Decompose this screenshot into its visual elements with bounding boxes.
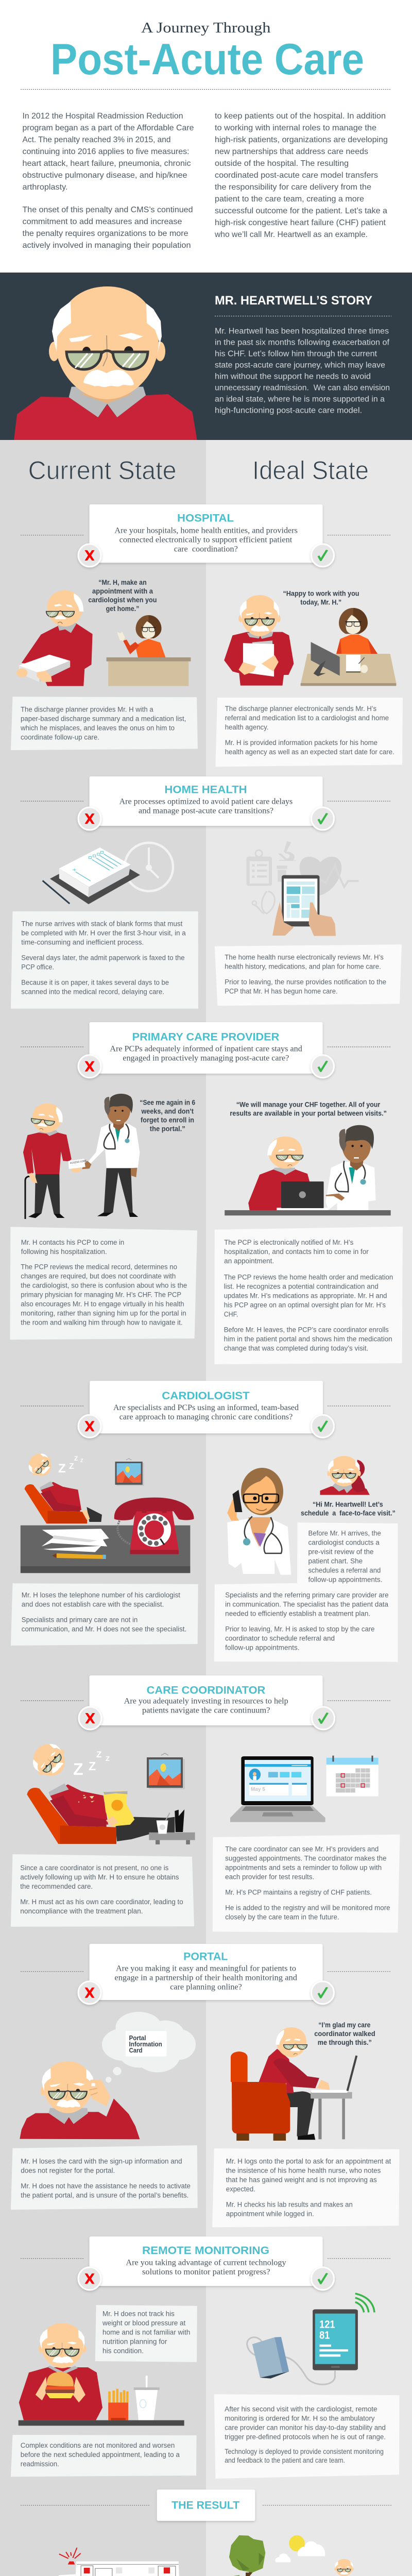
illustration: Mr. H thinking about portal card: Information xyxy=(129,2040,162,2048)
speech: glad my care coordinator xyxy=(314,2021,375,2046)
intro text left column: The onset of this penalty and CMS’s continued xyxy=(23,206,193,214)
text card: home health current xyxy=(11,911,198,1009)
story text xyxy=(215,327,390,415)
text card: portal ideal: appointment while logged in. xyxy=(226,2210,314,2217)
text card: remote monitoring current: Complex conditions are not monitored and worsen xyxy=(21,2442,175,2449)
text card: portal ideal: expected. xyxy=(226,2185,255,2193)
text card: home health current: PCP office. xyxy=(21,963,54,971)
text card: cardiologist ideal: in communication. The specialist has the patient data xyxy=(225,1601,389,1608)
section: Primary Care Provider question: PRIMARY CARE PROVIDER xyxy=(132,1031,279,1043)
illustration: Mr. H thinking about portal card: Portal xyxy=(129,2034,146,2042)
illustration: cardiologist on phone and Mr. H on phone xyxy=(227,1456,370,1575)
text card: portal current: Mr. H loses the card with the sign-up information and xyxy=(21,2158,182,2165)
text card: care coordinator current: actively following up with Mr. H to ensure he obtains xyxy=(20,1873,179,1881)
text card: PCP current: primary physician for managing Mr. H’s CHF. The PCP xyxy=(21,1291,181,1298)
text card: tracking weight inset: his condition. xyxy=(102,2347,144,2355)
story text: him without the support he needs to avoid xyxy=(215,372,371,381)
speech: see me again: “See me again in 6 xyxy=(140,1098,195,1106)
text card: PCP ideal xyxy=(214,1227,403,1364)
text card: PCP ideal: hospitalization, and contacts him to come in for xyxy=(224,1248,369,1256)
section: The Result heading: THE RESULT xyxy=(171,2499,239,2511)
illustration: blood pressure cuff and phone: 81 xyxy=(319,2329,330,2341)
speech: glad my care coordinator: me through this.” xyxy=(318,2038,372,2046)
intro text left column: Act. The penalty reached 3% in 2015, and xyxy=(23,135,171,144)
text card: hospital current: The discharge planner provides Mr. H with a xyxy=(21,706,153,714)
speech: let's schedule a visit: schedule a face-to-face visit.” xyxy=(301,1509,396,1517)
illustration: Mr. H asleep with desk and telephone: Z xyxy=(69,1462,74,1471)
text card: remote monitoring current xyxy=(11,2435,197,2477)
panel: ideal state background xyxy=(206,440,412,2576)
illustration: Mr. H with paper and discharge planner xyxy=(16,590,191,686)
text card: PCP current: the room and walking him through how to navigate it. xyxy=(21,1318,183,1326)
text card: hospital current xyxy=(11,697,198,750)
text card: PCP ideal: The PCP is electronically notified of Mr. H’s xyxy=(224,1239,353,1246)
text card: hospital current: which he misplaces, and leaves the onus on him to xyxy=(20,724,175,732)
section: Cardiologist question: Are specialists and PCPs using an informed, team-based xyxy=(113,1403,299,1412)
intro text left column: program began as a part of the Affordable Care xyxy=(23,124,194,132)
speech: we will manage your CHF: results are available in your portal between visits.” xyxy=(230,1109,387,1117)
text card: remote monitoring current: readmission. xyxy=(21,2460,59,2468)
text card: cardiologist ideal xyxy=(214,1522,398,1662)
intro text right column: new partnerships that address care needs xyxy=(215,147,368,156)
section: Cardiologist question: CARDIOLOGIST xyxy=(162,1390,250,1402)
text card: care coordinator current: Since a care coordinator is not present, no one is xyxy=(20,1864,169,1872)
title: Post-Acute Care xyxy=(50,35,364,84)
text card: cardiologist ideal: needed to efficiently establish a treatment plan. xyxy=(225,1610,370,1618)
text card: home health ideal: The home health nurse electronically reviews Mr. H’s xyxy=(225,954,384,961)
text card: care coordinator current: noncompliance with the treatment plan. xyxy=(20,1907,143,1915)
section: Remote Monitoring question xyxy=(21,2236,391,2290)
illustration: Mr. H with cane and doctor handing card: ACCESS CODE xyxy=(70,1159,87,1164)
text card: hospital ideal xyxy=(215,698,403,767)
text card: care coordinator current xyxy=(11,1854,194,1927)
intro text left column: continuing into 2016 applies to five measures: xyxy=(23,147,190,156)
text card: PCP ideal: list. He recognizes a potential contraindication and xyxy=(224,1282,379,1290)
story text: his CHF. Let’s follow him through the current xyxy=(215,350,377,359)
speech: see me again: weeks, and don’t xyxy=(141,1107,194,1115)
section: Portal question: PORTAL xyxy=(183,1951,228,1963)
intro text right column: high-risk congestive heart failure (CHF) patient xyxy=(215,218,386,227)
story text: state post-acute care journey, which may leave xyxy=(215,361,385,370)
intro text right column: outside of the hospital. The resulting xyxy=(215,159,349,168)
story text: in the past six months following exacerbation of xyxy=(215,338,390,347)
text card: cardiologist ideal: follow-up appointments. xyxy=(225,1644,300,1652)
text card: remote monitoring ideal: trigger pre-defined protocols when he is out of range. xyxy=(225,2433,386,2441)
panel: Mr. Heartwell's story xyxy=(0,273,412,440)
illustration: tablet with health icons xyxy=(247,841,358,936)
text card: cardiologist current: communication, and Mr. H does not see the specialist. xyxy=(22,1625,186,1633)
section: Remote Monitoring question: Are you taking advantage of current technology xyxy=(126,2259,286,2267)
text card: care coordinator current: Mr. H must act as his own care coordinator, leading to xyxy=(20,1898,183,1906)
illustration: Mr. H asleep with desk and telephone: Z xyxy=(74,1455,78,1462)
text card: cardiologist ideal: Before Mr. H arrives, the xyxy=(308,1530,381,1537)
intro text left column: arthroplasty. xyxy=(23,183,68,192)
speech: happy to work with you: “Happy to work with you xyxy=(283,589,359,598)
text card: home health ideal xyxy=(215,944,402,1006)
illustration: Mr. H thinking about portal card: Card xyxy=(129,2046,143,2054)
text card: PCP current xyxy=(10,1227,197,1340)
text card: PCP ideal: his PCP agree on an optimal oversight plan for Mr. H’s xyxy=(224,1301,386,1309)
text card: cardiologist ideal: Prior to leaving, Mr. H is asked to stop by the care xyxy=(225,1625,375,1633)
heading: ideal state: Ideal State xyxy=(252,456,369,485)
speech: make an appointment xyxy=(88,578,157,613)
text card: remote monitoring ideal: After his second visit with the cardiologist, remote xyxy=(225,2405,377,2413)
text card: care coordinator ideal: appointments and sets a reminder to follow up with xyxy=(225,1864,382,1872)
text card: portal current: the patient portal, and is unsure of the portal’s benefits. xyxy=(21,2192,188,2199)
text card: cardiologist ideal: schedules a referral and xyxy=(308,1567,381,1574)
section: Remote Monitoring question: solutions to monitor patient progress? xyxy=(142,2268,270,2277)
section: Care Coordinator question: CARE COORDINATOR xyxy=(147,1684,265,1696)
illustration: laptop with patient record and calendar: May 5 xyxy=(251,1787,265,1792)
section: Hospital question: HOSPITAL xyxy=(177,512,234,524)
text card: cardiologist ideal: cardiologist conducts a xyxy=(308,1539,380,1547)
speech: happy to work with you: today, Mr. H.” xyxy=(300,598,341,606)
text card: PCP ideal: CHF. xyxy=(224,1310,238,1318)
text card: remote monitoring ideal xyxy=(214,2394,400,2479)
text card: tracking weight inset xyxy=(95,2305,197,2362)
speech: glad my care coordinator: coordinator walked xyxy=(314,2029,375,2038)
text card: care coordinator ideal xyxy=(213,1835,400,1933)
intro text left column: obstructive pulmonary disease, and hip/knee xyxy=(23,171,187,180)
panel: current state background xyxy=(0,440,206,2576)
text card: care coordinator ideal: Mr. H’s PCP maintains a registry of CHF patients. xyxy=(225,1889,372,1896)
text card: remote monitoring ideal: and feedback to the patient and care team. xyxy=(225,2456,345,2464)
text card: care coordinator ideal: He is added to the registry and will be monitored more xyxy=(225,1904,390,1912)
text card: cardiologist ideal: coordinator to schedule referral and xyxy=(225,1635,335,1642)
text card: PCP current: the cardiologist, so there is confusion about who is the xyxy=(21,1281,187,1289)
text card: PCP current: monitoring, rather than signing him up for the portal in xyxy=(21,1309,186,1317)
text card: hospital current: coordinate follow-up care. xyxy=(21,734,99,741)
section: Primary Care Provider question xyxy=(21,1022,391,1078)
illustration: Mr. H asleep with desk and telephone xyxy=(21,1449,194,1573)
section: Cardiologist question xyxy=(21,1381,391,1437)
text card: PCP ideal: The PCP reviews the home health order and medication xyxy=(224,1273,393,1281)
speech: happy to work with you xyxy=(283,589,359,606)
text card: home health ideal: health history, medications, and plan for home care. xyxy=(225,963,381,971)
text card: remote monitoring ideal: care provider can monitor his day-to-day stability and xyxy=(225,2424,386,2431)
text card: portal ideal: Mr. H logs onto the portal to ask for an appointment at xyxy=(226,2158,391,2165)
section: Hospital question: Are your hospitals, home health entities, and providers xyxy=(114,526,298,535)
speech: make an appointment: get home.” xyxy=(106,604,139,613)
text card: care coordinator current: the recommended care. xyxy=(20,1883,93,1890)
text card: portal current xyxy=(11,2145,198,2210)
text card: portal ideal: that he has gained weight and is not improving as xyxy=(226,2176,377,2184)
text card: tracking weight inset: nutrition planning for xyxy=(102,2338,167,2346)
story text: an ideal state, where he is more supported in a xyxy=(215,395,385,404)
speech: see me again: forget to enroll in xyxy=(141,1115,194,1124)
text card: PCP ideal: updates Mr. H’s medications as appropriate. Mr. H and xyxy=(224,1292,387,1299)
section: Care Coordinator question xyxy=(21,1675,391,1730)
illustration: Mr. H asleep with desk and telephone: Z xyxy=(80,1458,83,1463)
illustration: Mr. H asleep in recliner with chips: Z xyxy=(96,1750,101,1759)
illustration: Mr. H thinking about portal card xyxy=(20,2012,196,2139)
speech: glad my care coordinator: “I’m glad my care xyxy=(318,2021,371,2029)
text card: cardiologist ideal: Specialists and the referring primary care provider are xyxy=(225,1591,388,1599)
text card: hospital ideal: health agency as well as an expected start date for care. xyxy=(225,748,394,756)
section: The Result heading xyxy=(21,2489,391,2521)
text card: home health current: Several days later, the admit paperwork is faxed to the xyxy=(21,954,185,961)
text card: cardiologist current: and does not establish care with the specialist. xyxy=(22,1601,164,1608)
section: Hospital question: connected electronically to support efficient patient xyxy=(119,535,293,544)
illustration: paper forms and clock xyxy=(43,843,173,904)
text card: cardiologist current: Mr. H loses the telephone number of his cardiologist xyxy=(22,1591,180,1599)
text card: care coordinator ideal: The care coordinator can see Mr. H’s providers and xyxy=(225,1845,379,1853)
intro text right column: to working with internal roles to manage the xyxy=(215,124,376,132)
intro text right column: the responsibility for care delivery from the xyxy=(215,183,371,192)
speech: make an appointment: “Mr. H, make an xyxy=(98,578,147,586)
speech: see me again xyxy=(140,1098,195,1132)
story heading: MR. HEARTWELL’S STORY xyxy=(215,294,372,308)
section: Home Health question: HOME HEALTH xyxy=(164,784,247,796)
text card: home health current: The nurse arrives with stack of blank forms that must xyxy=(21,920,183,927)
heading: current state: Current State xyxy=(28,456,177,485)
text card: remote monitoring ideal: monitoring is ordered for Mr. H so the ambulatory xyxy=(225,2414,375,2422)
text card: cardiologist ideal: patient chart. She xyxy=(308,1557,363,1565)
intro text right column: who we’ll call Mr. Heartwell as an example. xyxy=(214,230,368,239)
illustration: Mr. H with cane and doctor handing card xyxy=(23,1094,140,1219)
text card: home health current: be completed with Mr. H over the first 3-hour visit, in a xyxy=(21,929,186,937)
text card: care coordinator ideal: each provider for test results. xyxy=(225,1873,314,1881)
text card: PCP current: also encourages Mr. H to engage virtually in his health xyxy=(21,1300,184,1308)
illustration: Mr. Heartwell portrait xyxy=(14,286,197,440)
section: Primary Care Provider question: Are PCPs adequately informed of inpatient care stays and xyxy=(110,1044,302,1053)
intro text right column: to keep patients out of the hospital. In addition xyxy=(215,112,386,121)
speech: we will manage your CHF: “We will manage your CHF together. All of your xyxy=(236,1100,381,1108)
text card: tracking weight inset: weight or blood pressure at xyxy=(102,2319,185,2327)
section: Portal question: Are you making it easy and meaningful for patients to xyxy=(116,1964,296,1973)
text card: hospital current: paper-based discharge summary and a medication list, xyxy=(21,715,186,723)
intro text left column: commitment to add measures and increase xyxy=(23,217,182,226)
text card: portal current: Mr. H does not have the assistance he needs to activate xyxy=(21,2182,191,2190)
text card: portal ideal: the insistence of his home health nurse, who notes xyxy=(226,2167,381,2175)
intro text right column xyxy=(214,112,388,239)
text card: remote monitoring current: before the next scheduled appointment, leading to a xyxy=(21,2451,180,2459)
intro text right column: high-risk patients, organizations are developing xyxy=(215,135,388,144)
intro text left column: actively involved in managing their population xyxy=(23,241,191,250)
section: Portal question xyxy=(21,1944,391,2004)
illustration: Mr. H asleep in recliner with chips: Z xyxy=(89,1759,96,1773)
story text: high-functioning post-acute care model. xyxy=(215,406,362,415)
text card: PCP ideal: an appointment. xyxy=(224,1257,274,1265)
text card: PCP ideal: him in the patient portal and shows him the medication xyxy=(224,1335,392,1343)
intro text left column: the penalty requires organizations to be more xyxy=(23,229,188,238)
section: Home Health question: Are processes optimized to avoid patient care delays xyxy=(119,798,293,806)
illustration: Mr. H with folder and planner at computer xyxy=(224,595,396,686)
text card: cardiologist current xyxy=(11,1583,198,1646)
speech: make an appointment: appointment with a xyxy=(92,587,153,595)
text card: portal ideal xyxy=(212,2148,400,2227)
intro text right column: patient to the care team, creating a more xyxy=(215,195,364,204)
text card: PCP ideal: change that was completed during today’s visit. xyxy=(224,1344,368,1352)
text card: portal current: does not register for the portal. xyxy=(21,2167,115,2175)
text card: home health current: scanned into the medical record, delaying care. xyxy=(21,988,164,995)
section: Primary Care Provider question: engaged in proactively managing post-acute care? xyxy=(123,1054,289,1062)
text card: hospital ideal: health agency. xyxy=(225,723,268,731)
illustration: Mr. H eating burger, fries and soda xyxy=(19,2323,184,2426)
speech: we will manage your CHF xyxy=(230,1100,387,1117)
illustration: Mr. H asleep in recliner with chips: Z xyxy=(106,1755,110,1762)
text card: hospital ideal: Mr. H is provided information packets for his home xyxy=(225,739,377,747)
illustration: laptop with patient record and calendar xyxy=(230,1756,379,1822)
illustration: ambulance xyxy=(17,2548,190,2576)
speech: let's schedule a visit: “Hi Mr. Heartwell! Let’s xyxy=(313,1500,383,1508)
title: A Journey Through xyxy=(141,20,271,36)
text card: cardiologist ideal: pre-visit review of the xyxy=(308,1548,374,1556)
text card: cardiologist ideal: follow-up appointments. xyxy=(308,1576,382,1584)
text card: PCP current: changes are required, but does not coordinate with xyxy=(21,1272,176,1280)
text card: PCP current: Mr. H contacts his PCP to come in xyxy=(21,1239,124,1246)
section: Home Health question xyxy=(21,776,391,830)
text card: PCP current: following his hospitalization. xyxy=(21,1248,107,1256)
illustration: Mr. H asleep in recliner with chips: Z xyxy=(73,1760,83,1778)
intro text right column: coordinated post-acute care model transfers xyxy=(215,171,378,180)
text card: home health ideal: Prior to leaving, the nurse provides notification to the xyxy=(225,978,386,986)
section: Portal question: care planning online? xyxy=(170,1982,242,1991)
section: Care Coordinator question: patients navigate the care continuum? xyxy=(142,1706,270,1715)
illustration: Mr. H using laptop in armchair xyxy=(231,2027,356,2141)
section: Portal question: engage in a partnership of their health monitoring and xyxy=(114,1973,297,1982)
intro text left column: heart attack, heart failure, pneumonia, chronic xyxy=(23,159,191,168)
illustration: Mr. H and doctor at laptop xyxy=(225,1125,391,1215)
text card: cardiologist current: Specialists and primary care are not in xyxy=(22,1616,138,1624)
text card: care coordinator ideal: closely by the care team in the future. xyxy=(225,1913,339,1921)
illustration: Mr. H asleep with desk and telephone: Z xyxy=(58,1462,66,1476)
text card: PCP current: The PCP reviews the medical record, determines no xyxy=(21,1263,177,1270)
illustration: Mr. H asleep in recliner with chips xyxy=(26,1737,195,1844)
intro text left column xyxy=(23,112,194,250)
intro text left column: In 2012 the Hospital Readmission Reduction xyxy=(23,112,183,121)
text card: remote monitoring ideal: Technology is deployed to provide consistent monitoring xyxy=(225,2448,384,2455)
text card: hospital ideal: The discharge planner electronically sends Mr. H’s xyxy=(225,705,376,713)
section: Remote Monitoring question: REMOTE MONITORING xyxy=(142,2245,269,2257)
text card: hospital ideal: referral and medication list to a cardiologist and home xyxy=(225,714,389,722)
illustration: blood pressure cuff and phone: 121 xyxy=(319,2318,335,2330)
illustration: Mr. H in the park with pigeons xyxy=(229,2535,376,2576)
text card: PCP ideal: Before Mr. H leaves, the PCP’s care coordinator enrolls xyxy=(224,1326,389,1333)
text card: portal ideal: Mr. H checks his lab results and makes an xyxy=(226,2200,353,2208)
text card: home health current: time-consuming and inefficient process. xyxy=(21,938,144,946)
story text: unnecessary readmission. We can also envision xyxy=(215,384,390,393)
speech: see me again: the portal.” xyxy=(150,1124,185,1132)
section: Hospital question: care coordination? xyxy=(174,545,238,553)
speech: let's schedule a visit xyxy=(301,1500,396,1517)
intro text right column: successful outcome for the patient. Let’s take a xyxy=(215,207,387,215)
section: Cardiologist question: care approach to managing chronic care conditions? xyxy=(119,1413,293,1421)
text card: home health ideal: PCP that Mr. H has begun home care. xyxy=(225,988,338,995)
section: Care Coordinator question: Are you adequately investing in resources to help xyxy=(124,1697,288,1705)
speech: make an appointment: cardiologist when you xyxy=(88,596,157,604)
text card: tracking weight inset: home and is not familiar with xyxy=(102,2329,190,2336)
section: Hospital question xyxy=(21,504,391,567)
section: Home Health question: and manage post-acute care transitions? xyxy=(139,807,273,816)
story text: Mr. Heartwell has been hospitalized three times xyxy=(215,327,389,336)
text card: home health current: Because it is on paper, it takes several days to be xyxy=(21,979,169,987)
illustration: blood pressure cuff and phone xyxy=(247,2294,374,2384)
text card: tracking weight inset: Mr. H does not track his xyxy=(102,2310,175,2318)
text card: care coordinator ideal: suggested appointments. The coordinator makes the xyxy=(225,1855,386,1862)
